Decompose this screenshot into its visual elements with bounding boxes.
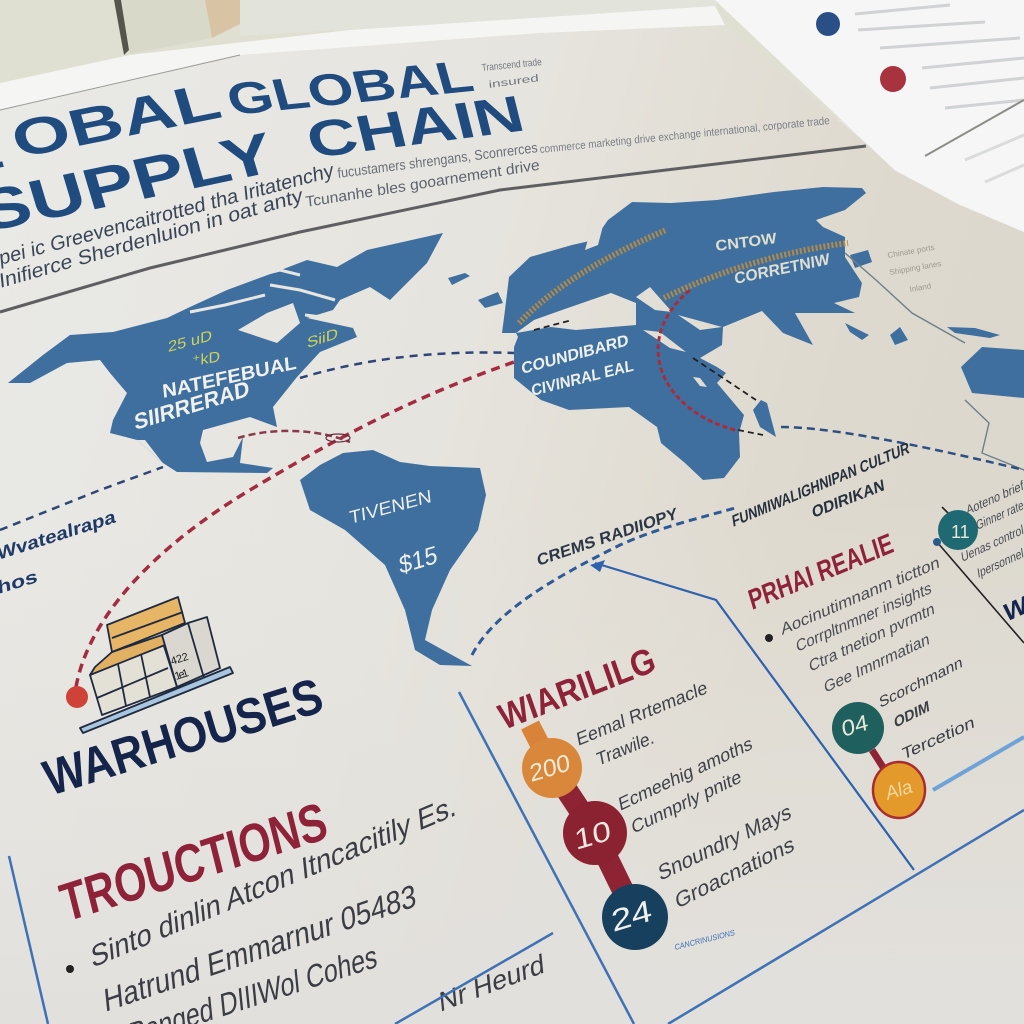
- bullet: [765, 634, 773, 642]
- map label: North America: NATEFEBUAL: [161, 353, 298, 403]
- route: red dashed warehouse to Africa: [76, 362, 514, 687]
- page lower shading: [0, 500, 1024, 1024]
- panel: right edge: [933, 478, 1024, 643]
- east asia notes: Chinate ports: [887, 243, 935, 260]
- panel: warililg: [459, 639, 796, 1024]
- east asia notes: [887, 243, 942, 294]
- route: origin dot: [66, 686, 88, 708]
- body text: Nr Heurd: [438, 948, 546, 1018]
- step teal: [938, 510, 978, 550]
- header intro text: Tcunanhe bles gooarnement drive: [305, 157, 540, 211]
- step text: Tercetion: [901, 713, 976, 764]
- body text: [89, 788, 546, 1024]
- step text: Eemal Rrtemacle: [575, 677, 709, 751]
- facing page at top right: [715, 0, 1024, 290]
- header side note: Transcend trade: [481, 57, 543, 74]
- heading: warililg: WIARILILG: [493, 639, 661, 738]
- title: CHAIN: [301, 85, 530, 169]
- header intro text: commerce marketing drive exchange international, corporate trade: [539, 115, 830, 156]
- header side note: insured: [488, 73, 539, 91]
- step 04: [832, 702, 884, 754]
- map label: Asia: [715, 230, 831, 288]
- baja gap: [137, 440, 162, 462]
- british isles: [478, 292, 503, 308]
- continent: Eurasia and Africa: [502, 187, 866, 480]
- step text: Groacnations: [673, 831, 796, 914]
- mediterranean sea: [516, 293, 636, 333]
- step 200: 200: [528, 750, 572, 788]
- map: [0, 187, 1024, 708]
- step text: ODIM: [893, 698, 931, 732]
- panel border: [595, 563, 914, 870]
- east asia notes: Inland: [909, 281, 932, 294]
- left map caption: [0, 505, 117, 598]
- map label: North America figures: [168, 325, 338, 370]
- body text: Hatrund Emmarnur 05483: [102, 877, 418, 1019]
- body text: Gee Imnrmatian: [823, 629, 931, 697]
- step 04: 04: [840, 710, 870, 742]
- caption: funnel: ODIRIKAN: [811, 476, 886, 522]
- continent: Australia: [961, 347, 1024, 398]
- step Ala: [873, 762, 925, 818]
- step text: CANCRINUSIONS: [674, 928, 736, 952]
- icon: blue dot: [816, 12, 840, 36]
- east asia outlines: [845, 253, 1024, 470]
- madagascar: [753, 400, 776, 437]
- heading: tructions: TROUCTIONS: [54, 791, 333, 934]
- wooden table background: [0, 0, 1024, 120]
- body text: Ctra tnetion pvrmtn: [808, 599, 936, 676]
- step 200: [522, 738, 582, 798]
- map label: South America: [348, 485, 439, 580]
- black sea: [636, 287, 672, 312]
- header intro text: Inifierce Sherdenluion in oat anty: [0, 184, 304, 293]
- step text: Snoundry Mays: [656, 799, 793, 886]
- warehouses label: WARHOUSES: [37, 667, 329, 807]
- page top edge: [0, 6, 725, 110]
- map label: South America: TIVENEN: [348, 485, 432, 528]
- step text: Scorchmann: [878, 654, 964, 712]
- caption: funnel: [731, 438, 911, 531]
- icon: red dot: [880, 66, 906, 92]
- arctic islands gaps: [190, 270, 335, 318]
- route: hatched band Europe: [519, 230, 666, 323]
- header side note: [481, 57, 543, 91]
- map label: Asia: CORRETNIW: [734, 250, 831, 288]
- step text: Ecmeehig amoths: [617, 733, 754, 816]
- header intro text: pei ic Greevencaitrotted tha Iritatenchy: [0, 160, 335, 270]
- panel border: [9, 856, 48, 1024]
- header rule: [0, 146, 866, 312]
- map label: North America figures: ⁺kD: [192, 348, 220, 370]
- map label: North America figures: SiiD: [307, 325, 338, 352]
- connector orange: [530, 725, 552, 768]
- step 10: [563, 801, 627, 865]
- continent: Greenland islands: [448, 273, 470, 285]
- step 10: 10: [572, 815, 613, 857]
- icon: warehouse: 422: [169, 651, 190, 668]
- route: hatched band Asia: [664, 243, 848, 298]
- map label: South America: $15: [398, 541, 439, 580]
- connector: [872, 750, 888, 775]
- caption: funnel: FUNMIWALIGHNIPAN CULTUR: [731, 438, 911, 531]
- body text: [780, 553, 941, 697]
- asia islands: [845, 323, 869, 340]
- title: GLOBAL: [221, 50, 479, 125]
- bullet: [66, 965, 74, 973]
- map label: North America figures: 25 uD: [168, 327, 212, 356]
- icon: warehouse: 1e1: [173, 667, 190, 683]
- connector red: [552, 768, 636, 917]
- body text: Sinto dinlin Atcon Itncacitily Es.: [89, 788, 458, 975]
- header intro text: [0, 115, 830, 293]
- step Ala: Ala: [885, 776, 914, 805]
- step teal: 11: [951, 522, 970, 542]
- route: red arc small: [238, 431, 350, 442]
- map label: Africa: COUNDIBARD: [521, 331, 630, 378]
- header intro text: fucustamers shrengans, Sconrerces: [337, 139, 538, 181]
- route: red arc to Africa: [658, 290, 735, 430]
- title: [0, 50, 530, 245]
- panel border: [459, 692, 634, 1024]
- map label: Africa: CIVINRAL EAL: [531, 357, 634, 400]
- red sea: [643, 330, 686, 352]
- persian gulf: [678, 315, 722, 330]
- step text: [575, 677, 796, 952]
- baltic: [585, 218, 605, 250]
- map label: Africa: [521, 331, 634, 400]
- map label: Asia: CNTOW: [715, 230, 778, 255]
- caption: creams radiory: CREMS RADIIOPY: [536, 504, 679, 570]
- route: blue dashed lines: [0, 352, 514, 530]
- step text: Cunnprly pnite: [630, 767, 743, 839]
- body text: Corrpltnmner insights: [795, 578, 933, 656]
- step 24: 24: [609, 893, 654, 939]
- continent: North America: [8, 233, 443, 473]
- panel: prhia realie: [590, 528, 1024, 1024]
- body text: Aocinutimnanm tictton: [780, 553, 941, 639]
- step 24: [602, 884, 668, 950]
- step text: [878, 654, 976, 764]
- icon: warehouse: [80, 597, 233, 733]
- title: OBAL: [4, 71, 227, 169]
- east asia notes: Shipping lanes: [889, 259, 942, 277]
- step text: Trawile.: [595, 727, 656, 771]
- hudson bay: [238, 303, 300, 343]
- map label: North America: SIIRRERAD: [133, 376, 250, 435]
- heading: prhia realie: PRHAI REALIE: [745, 528, 897, 617]
- continent: South America: [300, 450, 486, 666]
- map label: North America: [133, 353, 298, 435]
- panel: tructions: [9, 788, 553, 1024]
